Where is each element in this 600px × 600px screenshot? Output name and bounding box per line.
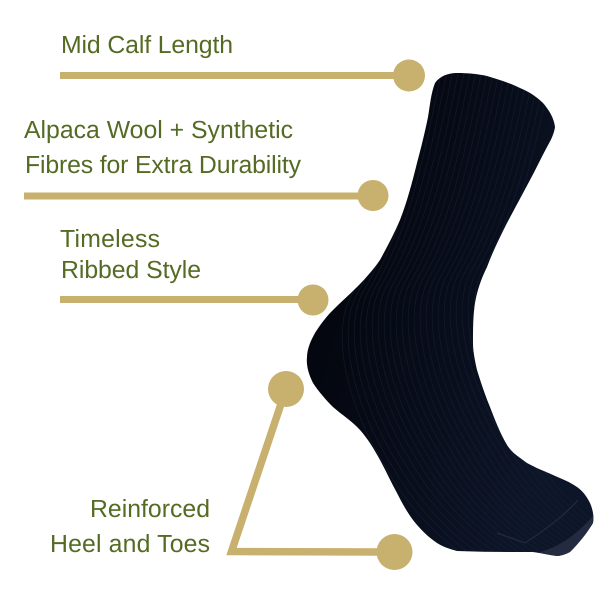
label: alpaca wool blend: Alpaca Wool + Synthetic xyxy=(24,117,293,144)
leader line xyxy=(24,192,369,200)
marker dot xyxy=(298,284,328,316)
callout: ribbed style xyxy=(60,226,328,316)
marker dot: heel xyxy=(268,371,304,407)
marker dot: toes xyxy=(376,534,412,570)
sock body xyxy=(307,73,593,556)
label: alpaca wool blend: Fibres for Extra Durability xyxy=(25,152,302,179)
leader line: angled bracket xyxy=(232,398,392,552)
label: reinforced heel and toes: Reinforced xyxy=(90,496,210,523)
leader line xyxy=(60,296,310,303)
label: ribbed style: Ribbed Style xyxy=(61,257,201,284)
label: mid calf length: Mid Calf Length xyxy=(61,32,233,59)
knit ribs and toe seam xyxy=(342,58,600,570)
sock illustration xyxy=(307,58,600,570)
leader line xyxy=(60,72,405,79)
callout: reinforced heel and toes xyxy=(50,371,412,570)
callout: alpaca wool blend xyxy=(24,117,388,211)
marker dot xyxy=(358,180,388,211)
marker dot xyxy=(393,60,425,92)
callout: mid calf length xyxy=(60,32,425,92)
label: reinforced heel and toes: Heel and Toes xyxy=(50,531,210,558)
label: ribbed style: Timeless xyxy=(60,226,160,253)
